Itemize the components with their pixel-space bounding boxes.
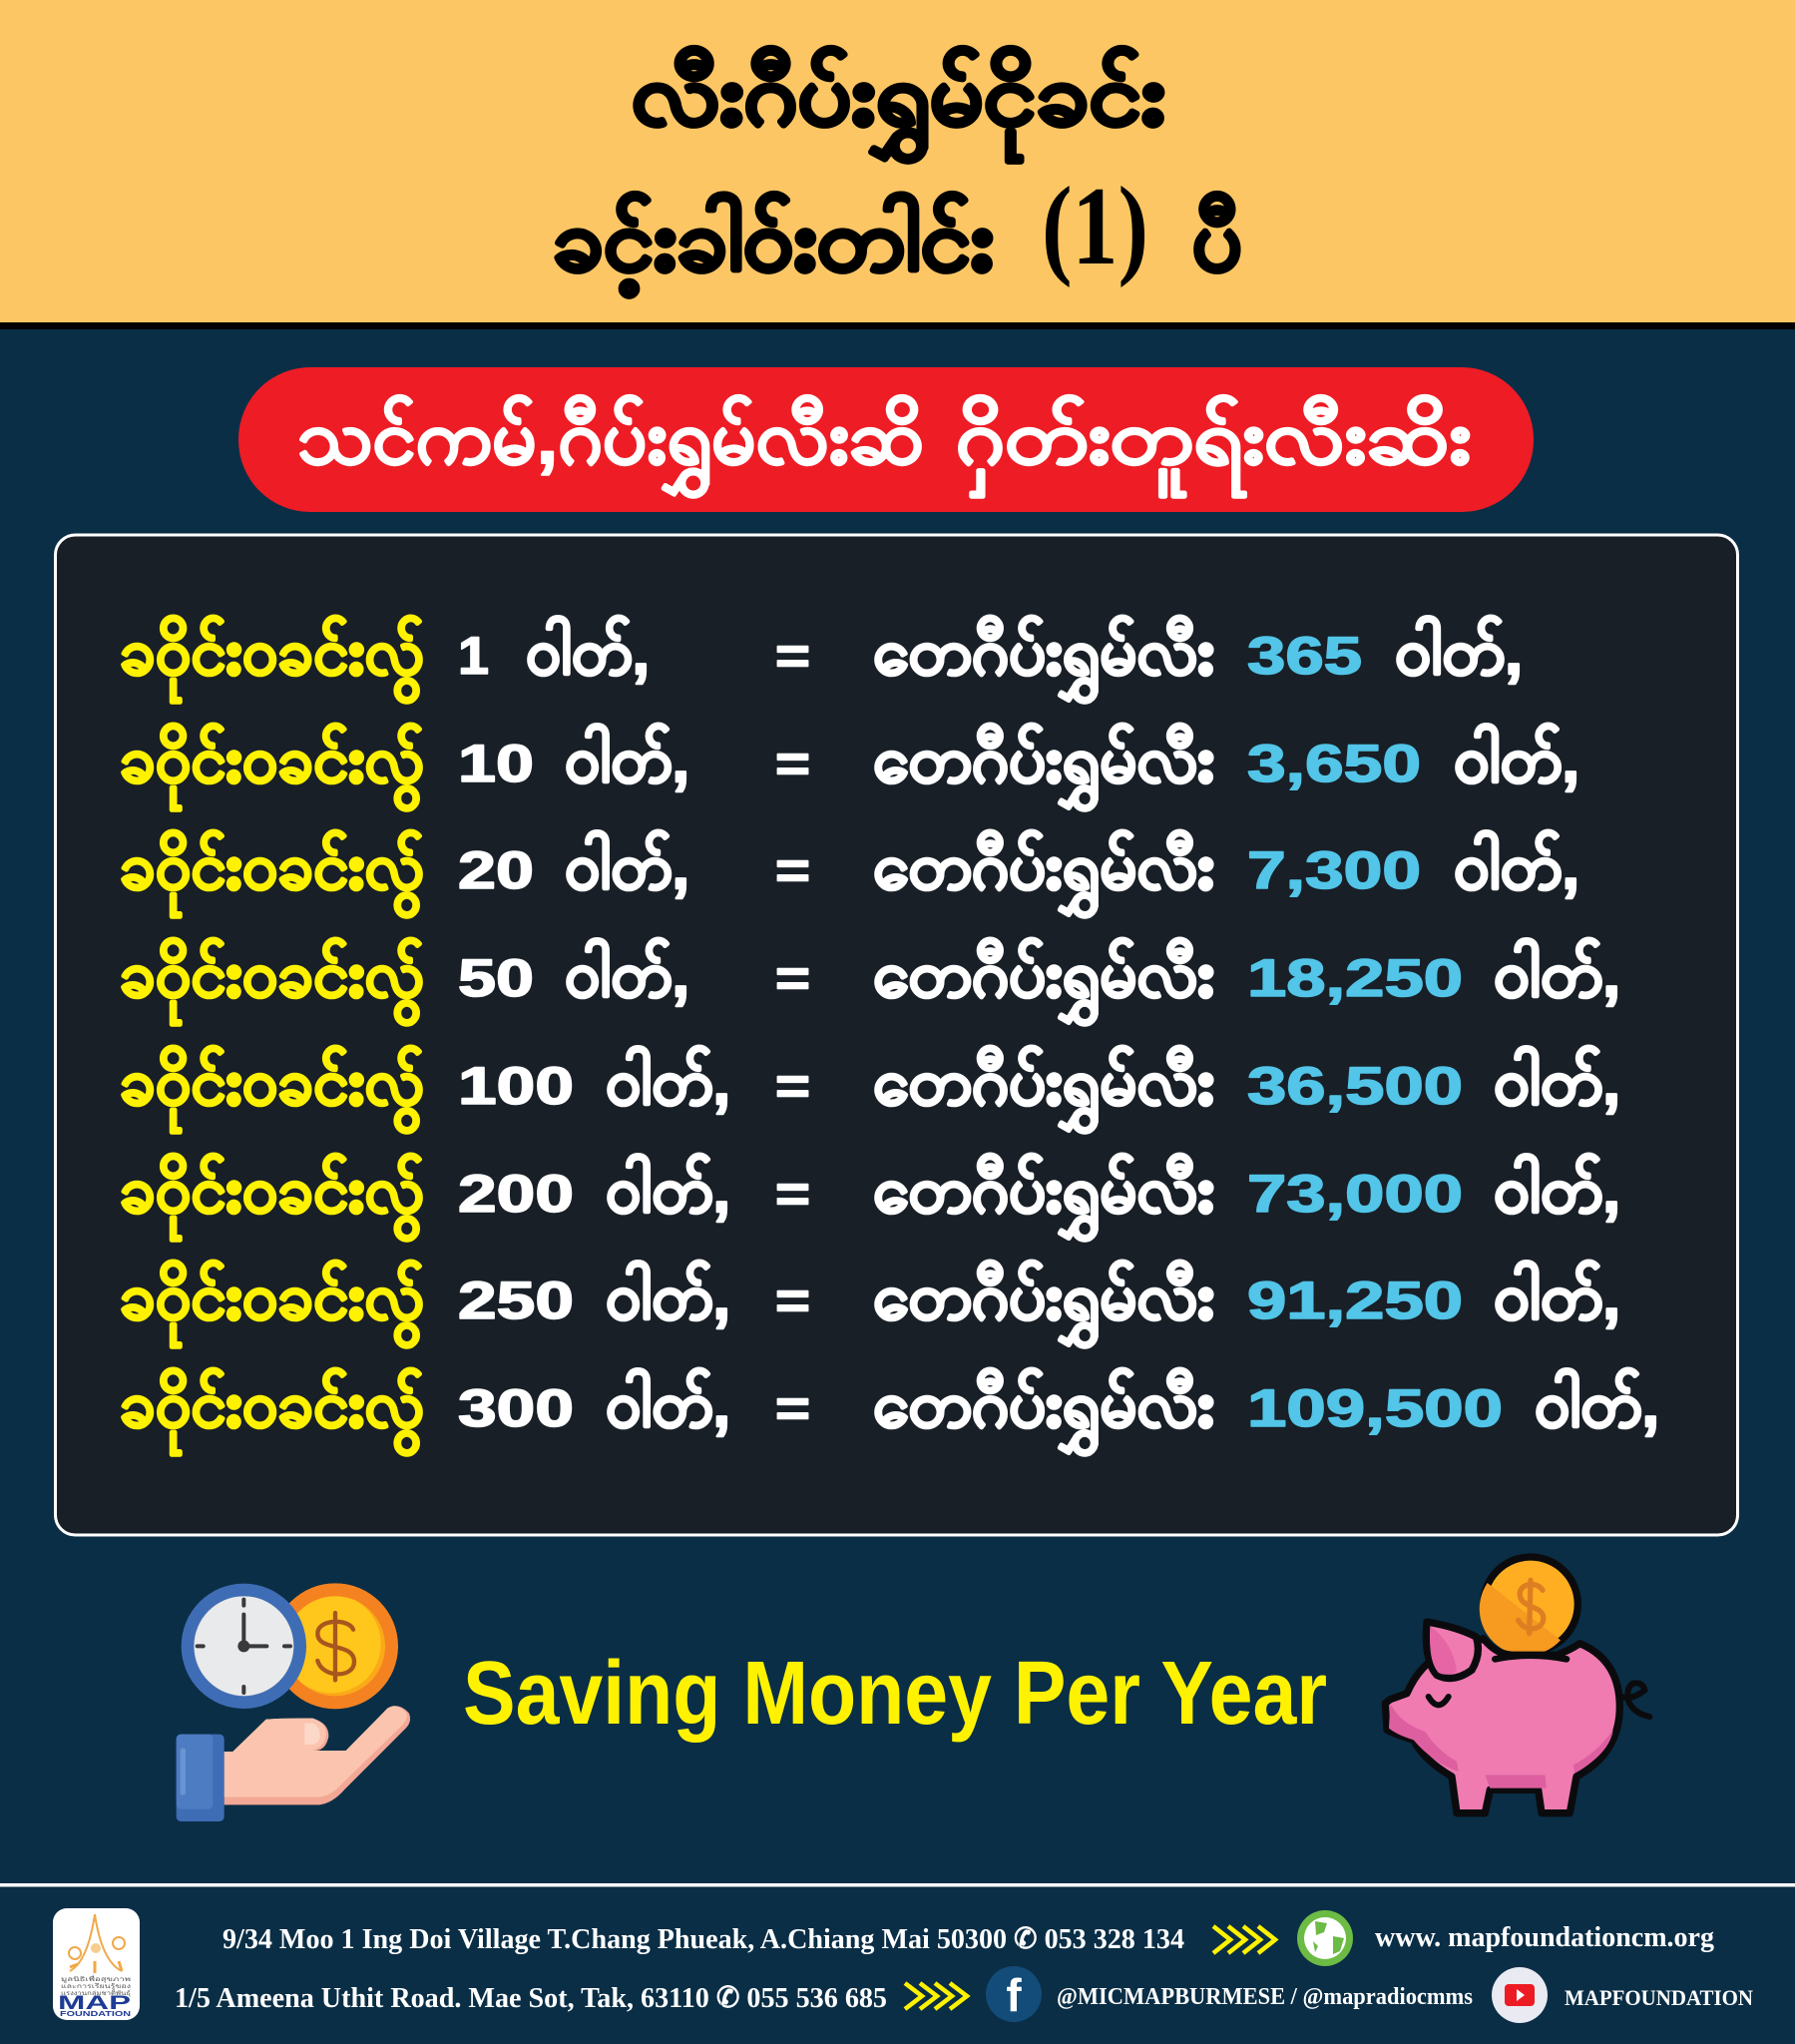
row 6: = bbox=[775, 1165, 810, 1224]
row 1: တေဂီပ်းရွှမ်လီး bbox=[873, 615, 1214, 703]
row 3: ဝါတ်, bbox=[1454, 829, 1579, 902]
row 3: ခဝိုင်းဝခင်းလွ် bbox=[120, 829, 424, 917]
row 4: 50 bbox=[458, 949, 534, 1008]
row 8: တေဂီပ်းရွှမ်လီး bbox=[873, 1367, 1214, 1455]
row 3: = bbox=[775, 841, 810, 900]
row 3: တေဂီပ်းရွှမ်လီး bbox=[873, 829, 1214, 917]
row 8: ဝါတ်, bbox=[1535, 1367, 1659, 1440]
row 1 bbox=[120, 615, 1523, 703]
row 5: 100 bbox=[458, 1057, 574, 1116]
logo: MAP Foundation: และการเรียนรู้ของ bbox=[61, 1981, 131, 1990]
row 7: = bbox=[775, 1272, 810, 1330]
arrow: chevrons row 1 bbox=[1213, 1926, 1275, 1953]
logo: MAP Foundation bbox=[53, 1908, 140, 2020]
row 5: ဝါတ်, bbox=[1494, 1045, 1620, 1118]
row 4: တေဂီပ်းရွှမ်လီး bbox=[873, 937, 1214, 1025]
row 5: ဝါတ်, bbox=[606, 1045, 730, 1118]
row 2: = bbox=[775, 735, 810, 793]
row 6: တေဂီပ်းရွှမ်လီး bbox=[873, 1153, 1214, 1241]
logo: MAP Foundation: แรงงานกลุ่มชาติพันธุ์ bbox=[61, 1988, 131, 1997]
red pill banner bbox=[238, 367, 1534, 512]
icon: clock, coin and hand bbox=[177, 1583, 410, 1821]
red pill banner: သင်ကမ်,ဂီပ်းရွှမ်လီးဆိ bbox=[297, 394, 924, 498]
row 5: = bbox=[775, 1057, 810, 1116]
row 4: 18,250 bbox=[1247, 949, 1463, 1008]
row 5: တေဂီပ်းရွှမ်လီး bbox=[873, 1045, 1214, 1133]
row 2: ဝါတ်, bbox=[565, 723, 689, 795]
logo: MAP Foundation: MAP bbox=[58, 1993, 132, 2014]
row 6: ဝါတ်, bbox=[1494, 1153, 1620, 1226]
row 1: 1 bbox=[458, 627, 489, 686]
row 4: = bbox=[775, 949, 810, 1008]
row 2: တေဂီပ်းရွှမ်လီး bbox=[873, 723, 1214, 810]
row 3: 7,300 bbox=[1247, 841, 1421, 900]
title line 2: (1) bbox=[1042, 165, 1148, 288]
row 3: 20 bbox=[458, 841, 534, 900]
heading: Saving Money Per Year: Saving Money Per Year bbox=[463, 1644, 1327, 1744]
row 7: ဝါတ်, bbox=[606, 1260, 730, 1332]
row 8: 300 bbox=[458, 1379, 574, 1438]
row 2: ခဝိုင်းဝခင်းလွ် bbox=[120, 723, 424, 810]
row 4: ဝါတ်, bbox=[565, 937, 689, 1010]
row 1: ဝါတ်, bbox=[526, 615, 650, 688]
title line 2: ခင့်းခါဝ်းတါင်း bbox=[553, 191, 994, 298]
row 2: 3,650 bbox=[1247, 735, 1421, 793]
header band bbox=[0, 0, 1795, 329]
social handles: @MICMAPBURMESE / @mapradiocmms bbox=[1057, 1984, 1473, 2010]
row 3 bbox=[120, 829, 1579, 917]
row 6 bbox=[120, 1153, 1620, 1241]
row 7: ဝါတ်, bbox=[1494, 1260, 1620, 1332]
row 2: ဝါတ်, bbox=[1454, 723, 1579, 795]
icon: facebook: f bbox=[1006, 1969, 1022, 2021]
row 2: 10 bbox=[458, 735, 534, 793]
footer address 1: 9/34 Moo 1 Ing Doi Village T.Chang Phueak, A.Chiang Mai 50300 ✆ 053 328 134 bbox=[223, 1923, 1184, 1955]
row 7: 91,250 bbox=[1247, 1272, 1463, 1330]
row 6: 200 bbox=[458, 1165, 574, 1224]
row 4: ခဝိုင်းဝခင်းလွ် bbox=[120, 937, 424, 1025]
red pill banner: ဂှိတ်းတူရ်းလီးဆိး bbox=[956, 394, 1471, 498]
youtube name: MAPFOUNDATION bbox=[1565, 1985, 1753, 2010]
row 8: 109,500 bbox=[1247, 1379, 1503, 1438]
row 4: ဝါတ်, bbox=[1494, 937, 1620, 1010]
website: www. mapfoundationcm.org bbox=[1375, 1921, 1714, 1953]
icon: globe bbox=[1297, 1910, 1353, 1966]
row 5: 36,500 bbox=[1247, 1057, 1463, 1116]
logo: MAP Foundation: มูลนิธิเพื่อสุขภาพ bbox=[61, 1974, 131, 1983]
row 8: ဝါတ်, bbox=[606, 1367, 730, 1440]
row 2 bbox=[120, 723, 1579, 810]
row 4 bbox=[120, 937, 1620, 1025]
row 7 bbox=[120, 1260, 1620, 1347]
row 1: ဝါတ်, bbox=[1395, 615, 1523, 688]
footer address 2: 1/5 Ameena Uthit Road. Mae Sot, Tak, 63110 ✆ 055 536 685 bbox=[175, 1982, 887, 2014]
title line 2: ပီ bbox=[1192, 191, 1242, 288]
icon: facebook bbox=[986, 1966, 1042, 2022]
row 1: ခဝိုင်းဝခင်းလွ် bbox=[120, 615, 424, 703]
title line 2 bbox=[553, 165, 1242, 298]
title line 1: လီးဂီပ်းရွှမ်ငိုခင်း bbox=[632, 45, 1165, 164]
logo: MAP Foundation: FOUNDATION bbox=[60, 2009, 131, 2018]
row 7: 250 bbox=[458, 1272, 574, 1330]
row 8 bbox=[120, 1367, 1659, 1455]
row 5 bbox=[120, 1045, 1620, 1133]
row 7: ခဝိုင်းဝခင်းလွ် bbox=[120, 1260, 424, 1347]
row 6: 73,000 bbox=[1247, 1165, 1463, 1224]
row 1: = bbox=[775, 627, 810, 686]
icon: piggy bank bbox=[1385, 1557, 1649, 1813]
arrow: chevrons row 2 bbox=[905, 1983, 967, 2009]
row 1: 365 bbox=[1247, 627, 1362, 686]
row 8: = bbox=[775, 1379, 810, 1438]
row 6: ခဝိုင်းဝခင်းလွ် bbox=[120, 1153, 424, 1241]
panel: savings table bbox=[56, 535, 1738, 1535]
row 3: ဝါတ်, bbox=[565, 829, 689, 902]
row 8: ခဝိုင်းဝခင်းလွ် bbox=[120, 1367, 424, 1455]
icon: youtube bbox=[1492, 1967, 1548, 2023]
row 5: ခဝိုင်းဝခင်းလွ် bbox=[120, 1045, 424, 1133]
row 6: ဝါတ်, bbox=[606, 1153, 730, 1226]
row 7: တေဂီပ်းရွှမ်လီး bbox=[873, 1260, 1214, 1347]
